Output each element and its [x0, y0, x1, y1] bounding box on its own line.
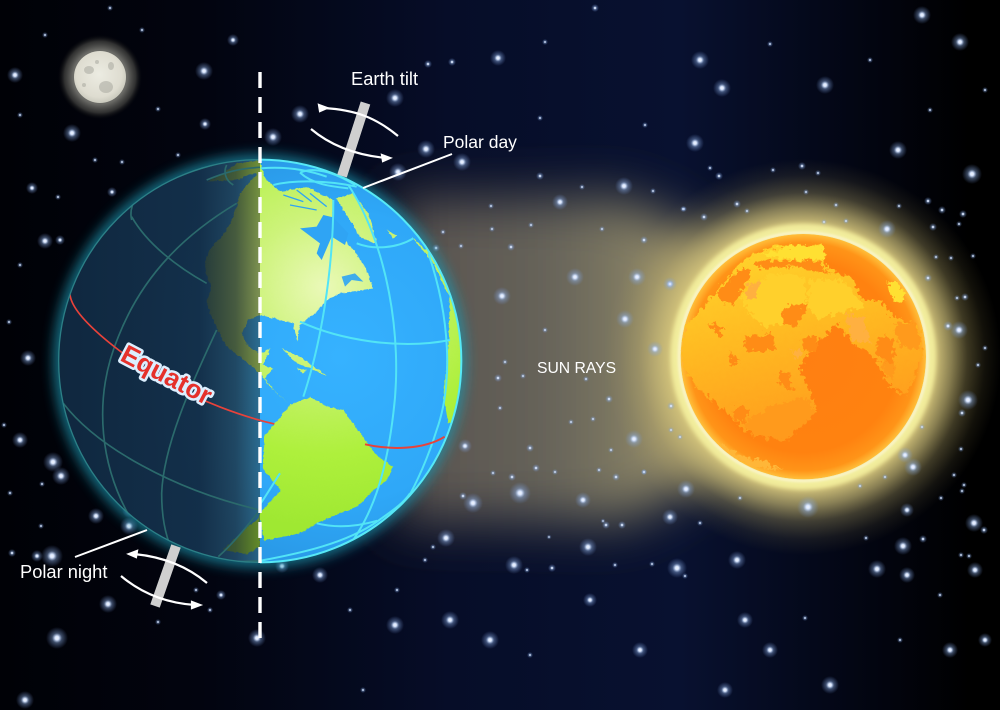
- earth glow: [53, 154, 467, 568]
- night side grid: [63, 165, 260, 562]
- sun surface patches: [680, 245, 923, 470]
- sun rays band: [395, 198, 730, 522]
- inland water: [300, 215, 363, 287]
- arctic cap: [207, 161, 264, 182]
- label: Polar night: Polar night: [20, 561, 107, 582]
- leader: polar night: [75, 530, 147, 557]
- sun disc: [680, 234, 926, 479]
- islands: [282, 230, 397, 376]
- greenland: [337, 193, 377, 245]
- sun ring: [676, 229, 931, 484]
- earth globe: [53, 150, 467, 583]
- terminator dashed line: [258, 72, 262, 640]
- rotation arrows north: [311, 105, 398, 161]
- night side shade: [53, 150, 260, 583]
- north axis: [311, 103, 398, 176]
- earth rim night: [58, 159, 258, 563]
- sun: [676, 229, 931, 484]
- earth rim day: [260, 158, 462, 564]
- eastern limb land: [412, 237, 467, 423]
- leader: polar day: [363, 154, 452, 188]
- label: Equator: Equator: [116, 339, 217, 411]
- label: SUN RAYS: SUN RAYS: [537, 360, 616, 377]
- continents: [205, 161, 467, 554]
- arctic channels: [283, 190, 327, 210]
- south america: [223, 397, 393, 554]
- north america: [205, 170, 373, 403]
- sun glow: [605, 159, 1000, 555]
- equator line: [70, 294, 274, 424]
- label: Polar day: Polar day: [443, 132, 517, 152]
- rotation arrows south: [121, 551, 207, 608]
- south axis: [121, 546, 207, 608]
- label: Earth tilt: Earth tilt: [351, 68, 418, 89]
- moon: [58, 35, 142, 119]
- day side grid: [261, 168, 450, 561]
- ocean: [59, 160, 461, 562]
